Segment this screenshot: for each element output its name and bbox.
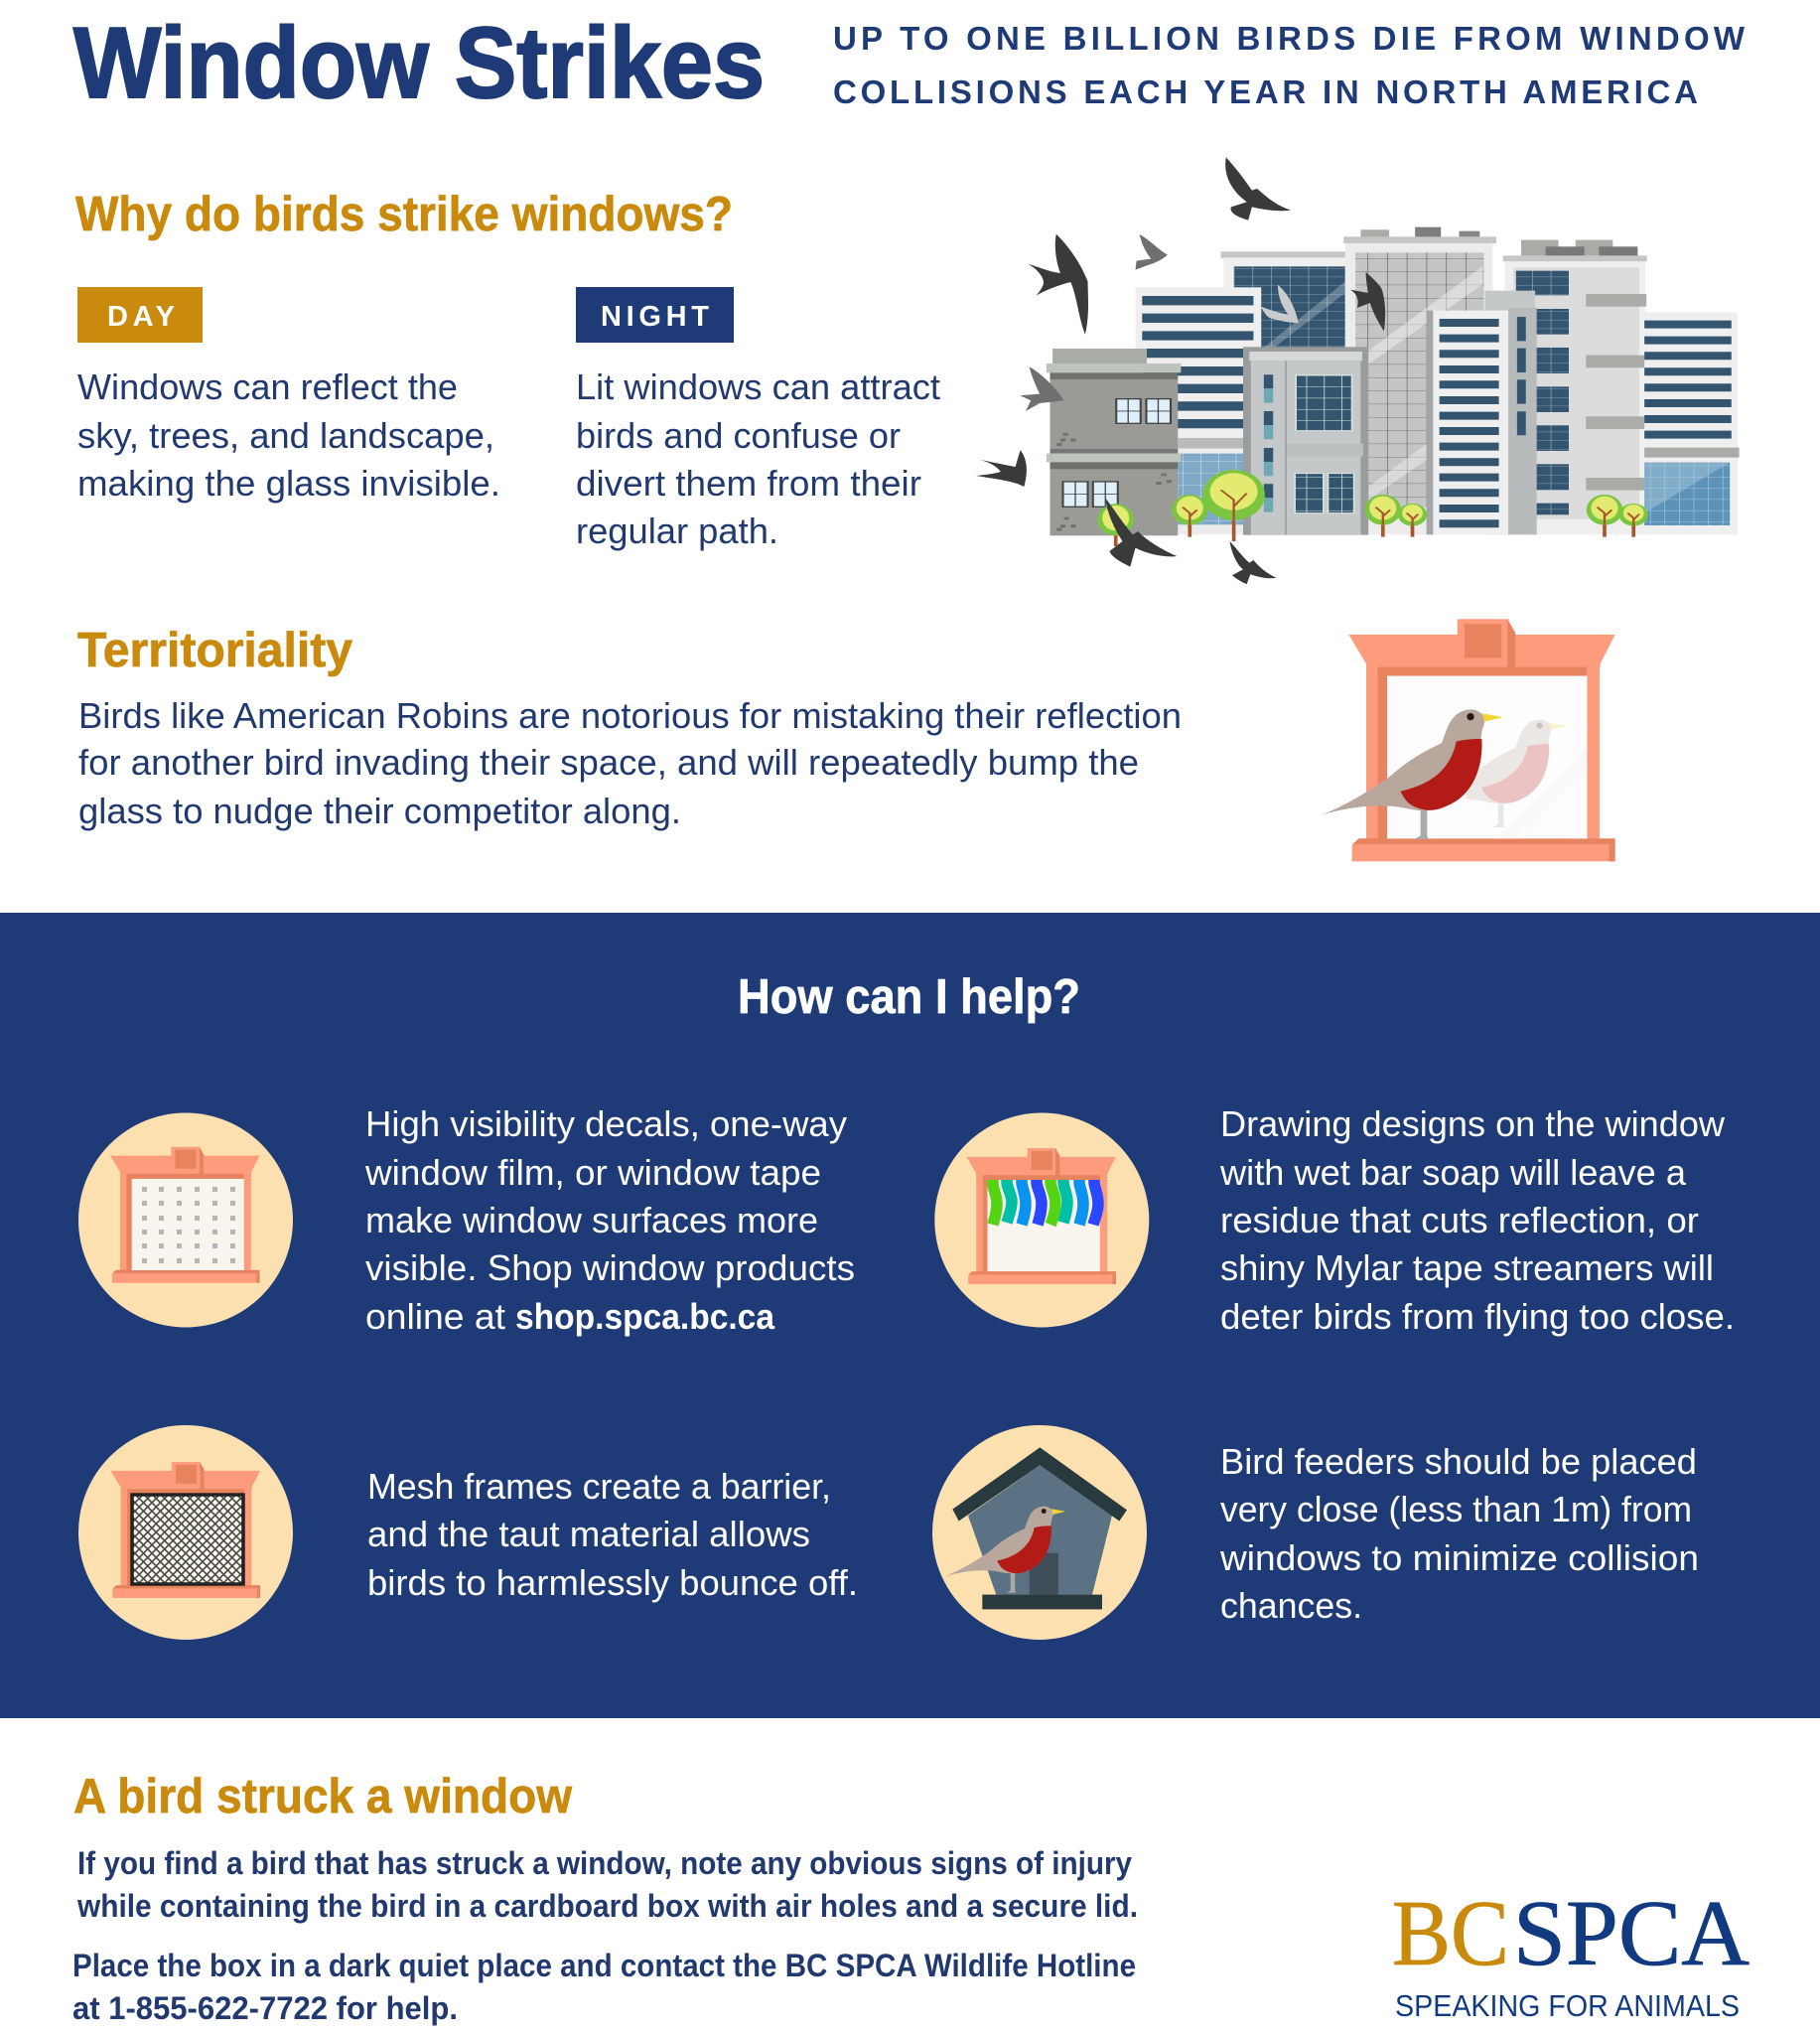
heading: why do birds strike windows: Why do birds strike windows? [75, 188, 733, 241]
night text [576, 366, 940, 551]
heading: how can i help: How can I help? [738, 970, 1080, 1024]
text: decals: High visibility decals, one-way [365, 1103, 847, 1144]
text: hotline: at 1-855-622-7722 for help. [72, 1990, 458, 2026]
text: containing the bird: while containing the bird in a cardboard box with air holes and a secure lid. [76, 1888, 1138, 1924]
day label: DAY [107, 301, 175, 333]
back dark glass building [1221, 251, 1347, 357]
flying birds [976, 157, 1385, 584]
text: bird feeders: Bird feeders should be placed [1220, 1441, 1697, 1482]
central grey building [1243, 347, 1368, 535]
subtitle: COLLISIONS EACH YEAR IN NORTH AMERICA [833, 73, 1698, 110]
text: hotline [72, 1948, 1136, 2026]
right tall building [1503, 240, 1647, 534]
heading: a bird struck a window: A bird struck a window [73, 1770, 573, 1823]
subtitle [833, 20, 1746, 110]
night text: regular path. [576, 510, 778, 551]
icon: window with decal dots [78, 1112, 293, 1327]
text: mesh frames: and the taut material allows [367, 1514, 810, 1554]
text: containing the bird [76, 1845, 1138, 1924]
text: decals: visible. Shop window products [365, 1247, 855, 1288]
text: territoriality: Birds like American Robins are notorious for mistaking their reflection [78, 695, 1182, 736]
night text: birds and confuse or [576, 415, 901, 456]
night text: Lit windows can attract [576, 366, 940, 407]
text: containing the bird: If you find a bird that has struck a window, note any obvious signs of injury [77, 1845, 1132, 1881]
night label: NIGHT [601, 301, 709, 333]
day badge [77, 287, 203, 343]
text: soap and mylar: with wet bar soap will leave a [1219, 1152, 1687, 1193]
far right striped building [1644, 312, 1740, 534]
icon: bird feeder with robin [932, 1425, 1147, 1640]
heading: territoriality: Territoriality [77, 624, 352, 677]
illustration: robin at window with reflection [1322, 619, 1615, 861]
text: mesh frames [367, 1466, 858, 1603]
text: territoriality: for another bird invading their space, and will repeatedly bump the [78, 742, 1139, 783]
text: bird feeders: windows to minimize collision [1219, 1537, 1699, 1578]
panel: day [77, 287, 500, 504]
illustration: city buildings with birds [976, 157, 1740, 584]
logo: BC SPCA: SPEAKING FOR ANIMALS [1395, 1988, 1740, 2023]
trees [1097, 470, 1648, 546]
day text: sky, trees, and landscape, [77, 415, 494, 456]
night text: divert them from their [576, 463, 921, 504]
day text [77, 366, 500, 504]
logo: BC SPCA: BC [1392, 1882, 1509, 1985]
text: decals: window film, or window tape [364, 1152, 821, 1193]
logo: BC SPCA: SPCA [1513, 1882, 1750, 1985]
title: Window Strikes [73, 8, 765, 119]
text: decals: online at [365, 1296, 505, 1337]
day text: Windows can reflect the [77, 366, 458, 407]
text: decals: shop.spca.bc.ca [515, 1296, 775, 1337]
text: soap and mylar: shiny Mylar tape streamers will [1220, 1247, 1714, 1288]
panel: night [576, 287, 940, 551]
day text: making the glass invisible. [77, 463, 500, 504]
central striped tower [1427, 291, 1537, 534]
text: mesh frames: Mesh frames create a barrier, [367, 1466, 831, 1507]
text: hotline: Place the box in a dark quiet place and contact the BC SPCA Wildlife Hotline [72, 1948, 1136, 1983]
text: decals [364, 1103, 855, 1337]
subtitle: UP TO ONE BILLION BIRDS DIE FROM WINDOW [833, 20, 1746, 57]
text: soap and mylar: residue that cuts reflection, or [1220, 1200, 1699, 1240]
text: bird feeders: chances. [1220, 1585, 1362, 1626]
text: bird feeders: very close (less than 1m) from [1220, 1489, 1692, 1529]
far left striped building [1136, 287, 1261, 534]
logo: BC SPCA [1392, 1882, 1750, 2023]
icon: window with soap and mylar streamers [934, 1112, 1149, 1327]
text: soap and mylar: Drawing designs on the window [1220, 1103, 1726, 1144]
text: decals: make window surfaces more [365, 1200, 818, 1240]
tall grid building [1343, 227, 1496, 534]
text: soap and mylar: deter birds from flying too close. [1220, 1296, 1735, 1337]
text: territoriality [78, 695, 1182, 831]
night badge [576, 287, 734, 343]
icon: window with mesh frame [78, 1425, 293, 1640]
text: mesh frames: birds to harmlessly bounce off. [367, 1562, 858, 1603]
text: soap and mylar [1219, 1103, 1735, 1337]
grey concrete building [1047, 349, 1181, 535]
panel: how can i help [0, 913, 1820, 1718]
text: territoriality: glass to nudge their competitor along. [78, 791, 681, 831]
text: bird feeders [1219, 1441, 1699, 1626]
